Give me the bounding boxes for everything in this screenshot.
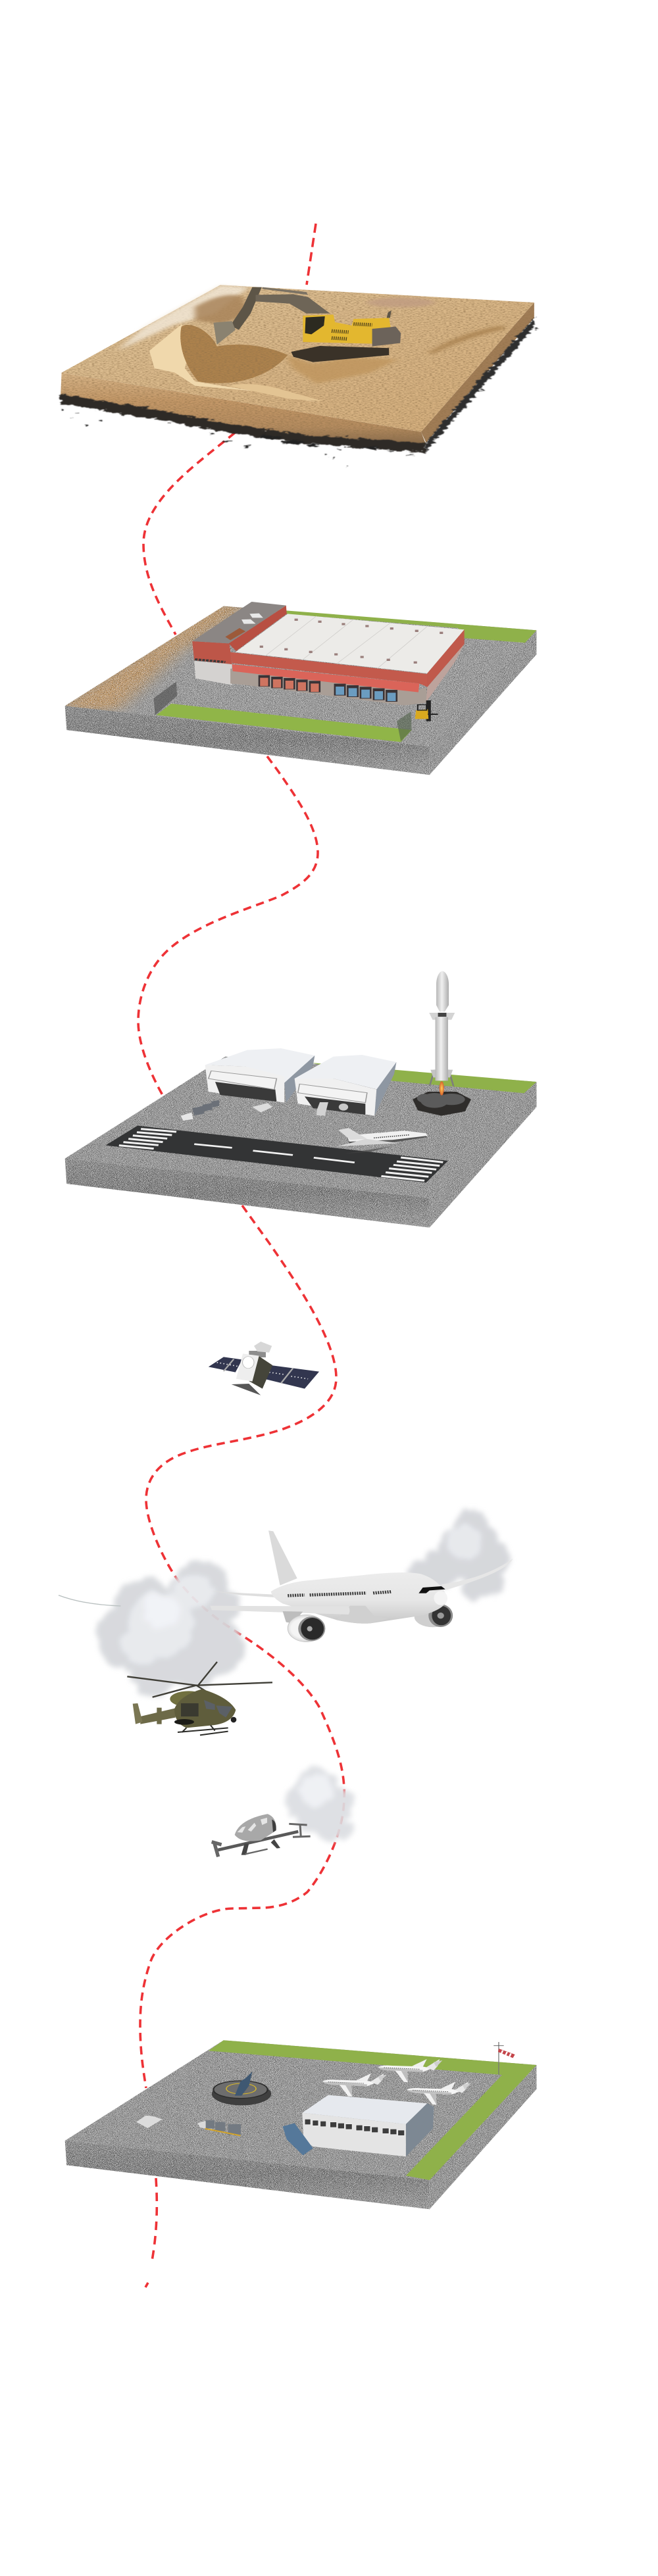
pod at hangar — [339, 1104, 348, 1111]
dock doors red — [259, 675, 320, 693]
scene 3: spaceport slab — [65, 971, 536, 1228]
hangar front wall — [205, 1065, 284, 1103]
lower dock wall — [230, 669, 427, 706]
drone front rotor — [289, 1824, 311, 1837]
solar panel left — [209, 1357, 242, 1373]
slab right face — [430, 630, 536, 775]
satellite dish bottom — [232, 1384, 261, 1396]
cloud right — [409, 1511, 510, 1600]
wind sock — [494, 2042, 515, 2075]
dock doors blue — [334, 684, 397, 702]
right lower wall — [426, 644, 465, 702]
rocket fins — [429, 1013, 455, 1020]
excavator body — [303, 314, 391, 344]
front grass strip — [156, 704, 412, 742]
canopy — [232, 664, 419, 693]
hangar windows — [305, 2119, 405, 2135]
satellite — [209, 1342, 319, 1396]
rocket fins lower — [430, 1070, 453, 1077]
scattered dirt crumbs — [62, 328, 538, 466]
far winglet tip — [59, 1595, 120, 1606]
passenger drone — [212, 1814, 311, 1857]
gravel top — [65, 1057, 536, 1198]
annex solar panels — [225, 628, 245, 640]
rocket fairing — [436, 971, 449, 1011]
sensor — [231, 1717, 236, 1722]
slab front face — [61, 373, 426, 445]
drone cabin — [235, 1814, 276, 1841]
tail stabiliser — [157, 1708, 162, 1724]
drone tail opening — [272, 1820, 276, 1832]
satellite white face — [236, 1353, 259, 1382]
pale fade at the back left corner — [117, 285, 249, 351]
apron tug — [136, 2116, 162, 2128]
annex skylights — [241, 614, 263, 624]
ground vehicle — [252, 1103, 272, 1113]
pad smoke — [417, 1093, 465, 1108]
infographic canvas — [58, 224, 540, 2288]
drone rear rotor — [212, 1842, 222, 1857]
cockpit windows — [418, 1586, 445, 1593]
jet aircraft 1 — [322, 2074, 387, 2097]
hangar side wall — [284, 1056, 315, 1103]
satellite dark side — [249, 1356, 272, 1389]
hangar roof — [302, 2095, 427, 2124]
back left spoil pile — [195, 295, 249, 324]
front soil dark layer — [61, 394, 426, 452]
runway — [105, 1126, 448, 1182]
roof vents — [260, 620, 443, 662]
dock door panels red — [260, 678, 319, 692]
skids — [178, 1725, 228, 1735]
right sand drift — [428, 326, 505, 354]
helipad — [212, 2072, 271, 2105]
gravel top with tan soil — [53, 600, 536, 746]
left fence — [154, 682, 177, 715]
rocket flame — [440, 1081, 444, 1096]
nose highlight — [434, 1591, 447, 1605]
hangar roof — [295, 1055, 397, 1090]
canopy windows — [204, 1700, 232, 1718]
slab front face — [65, 706, 430, 775]
rocket first stage — [435, 1017, 448, 1081]
right red wall — [427, 629, 465, 687]
slab right face — [430, 1082, 536, 1228]
tail boom — [140, 1708, 176, 1724]
excavator counterweight — [372, 327, 401, 347]
tail fin — [133, 1703, 143, 1724]
helicopter on pad — [235, 2072, 252, 2096]
rocket — [429, 971, 455, 1096]
excavator exhaust — [387, 310, 392, 318]
excavator tracks — [291, 346, 389, 362]
near wing — [210, 1606, 349, 1615]
hangar — [302, 2095, 434, 2156]
rotor blades — [127, 1662, 272, 1708]
far wing — [442, 1559, 513, 1590]
truck at hangar — [316, 1102, 328, 1116]
excavator — [213, 287, 401, 362]
pit edge mound — [229, 384, 323, 401]
red fascia — [230, 652, 428, 687]
runway threshold right — [381, 1157, 443, 1180]
window rows — [288, 1592, 392, 1595]
annex red wall — [192, 641, 232, 664]
near engine — [288, 1615, 325, 1642]
helipad deck — [213, 2081, 268, 2099]
gravel top — [65, 2040, 536, 2180]
hangar front wall — [295, 1079, 376, 1116]
warehouse building — [192, 602, 465, 706]
runway centre dashes — [194, 1144, 355, 1163]
satellite antenna — [254, 1342, 272, 1353]
white corrugated roof — [236, 614, 465, 673]
left hangar — [205, 1048, 315, 1103]
slab right face tan — [421, 303, 534, 443]
sand top surface — [62, 285, 534, 432]
cloud left — [96, 1561, 244, 1697]
solar panel right — [260, 1365, 319, 1389]
satellite dish circle — [243, 1357, 254, 1369]
hangar front — [302, 2113, 406, 2156]
right hangar — [295, 1055, 397, 1116]
hangar opening — [305, 1096, 365, 1115]
annex lower white wall — [194, 661, 232, 685]
horizontal stabiliser — [210, 1591, 279, 1597]
boarding stairs — [283, 2123, 313, 2155]
rocket pod — [174, 1719, 194, 1725]
slab right face dark — [425, 318, 534, 452]
annex grey roof — [192, 602, 286, 643]
fuselage — [271, 1572, 447, 1624]
door opening — [181, 1703, 199, 1716]
business jet — [337, 1128, 428, 1154]
scene 1: excavation site slab — [61, 285, 538, 466]
slab front face — [65, 2141, 430, 2209]
wing root fairing — [283, 1611, 303, 1623]
drone legs — [241, 1843, 249, 1855]
excavator stick — [230, 287, 262, 330]
jet aircraft 3 — [407, 2081, 471, 2105]
slab right face — [430, 2065, 536, 2209]
hangar opening — [215, 1082, 276, 1102]
excavator cab window — [305, 316, 325, 334]
hangar side wall — [374, 1062, 397, 1116]
back grass strip — [311, 1063, 536, 1093]
baggage tug and carts — [181, 1100, 219, 1121]
dirt pile under tracks — [286, 355, 397, 383]
forklift — [415, 700, 438, 721]
dock door panels blue — [336, 687, 395, 701]
red dashed route line — [138, 224, 344, 2287]
drone windows — [238, 1818, 267, 1833]
annex windows — [195, 660, 225, 662]
helipad base — [212, 2083, 271, 2105]
excavated pit — [180, 325, 288, 383]
runway threshold left — [119, 1129, 176, 1149]
cloud small — [284, 1768, 355, 1842]
far engine — [415, 1604, 453, 1627]
rocket landing legs — [430, 1070, 453, 1086]
excavator bucket — [213, 321, 236, 345]
pad base — [413, 1092, 471, 1116]
airliner — [59, 1530, 513, 1642]
grass border — [209, 2040, 536, 2180]
tail fin — [268, 1530, 297, 1586]
back right hill — [367, 298, 434, 307]
hangar side — [406, 2103, 434, 2156]
belly fairing — [337, 1606, 388, 1624]
panel divider — [224, 1359, 293, 1383]
excavator vents — [332, 324, 372, 339]
hangar roof — [205, 1048, 315, 1083]
light ridge around pit — [149, 324, 323, 403]
launch pad — [413, 1092, 471, 1116]
annex side wall — [229, 606, 287, 651]
right fence — [397, 712, 412, 741]
back grass strip — [286, 610, 536, 643]
rocket interstage — [438, 1013, 446, 1017]
roof ribs — [266, 616, 428, 669]
military helicopter — [127, 1662, 272, 1735]
drone skid bar — [245, 1849, 268, 1854]
excavator boom — [256, 294, 330, 314]
fuselage — [174, 1689, 236, 1728]
drone arms — [217, 1832, 298, 1850]
baggage carts — [197, 2120, 241, 2135]
scene 2: warehouse slab — [53, 600, 536, 775]
hangar door — [298, 1084, 367, 1103]
satellite truss — [249, 1351, 266, 1357]
hangar door — [209, 1071, 276, 1090]
panel dots — [217, 1363, 308, 1379]
helipad ring — [226, 2083, 256, 2094]
jet aircraft 2 — [378, 2059, 442, 2082]
excavator hydraulic arm — [263, 287, 308, 295]
slab front face — [65, 1159, 430, 1228]
scene 5: airfield slab — [65, 2040, 536, 2209]
engine hump — [170, 1691, 207, 1707]
